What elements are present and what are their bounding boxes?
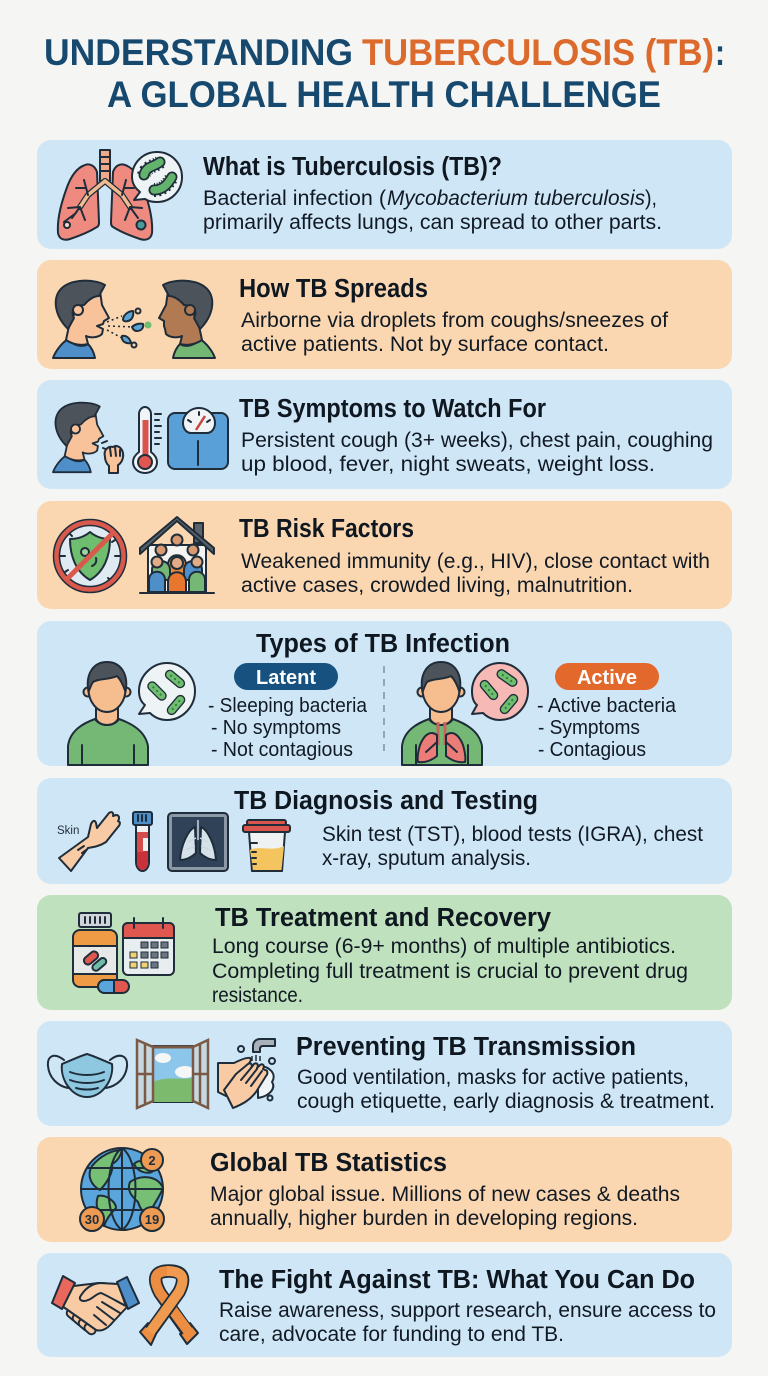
heading: How TB Spreads (239, 275, 428, 303)
panel: diagnosis and testing (37, 778, 732, 884)
icon: coughing person (53, 403, 123, 473)
icon: open window (137, 1040, 208, 1108)
text block: active cases, crowded living, malnutrition. (241, 573, 633, 597)
icon: lungs with bacteria bubble (58, 150, 182, 240)
text block: Persistent cough (3+ weeks), chest pain, coughing (241, 428, 713, 452)
text block: Weakened immunity (e.g., HIV), close contact with (241, 549, 710, 573)
text block: up blood, fever, night sweats, weight loss. (241, 452, 655, 476)
panel: symptoms (37, 380, 732, 489)
active list: - Active bacteria (537, 694, 677, 717)
icon: handshake (52, 1276, 139, 1336)
text block: Major global issue. Millions of new cases & deaths (210, 1182, 680, 1206)
text block: resistance. (212, 983, 303, 1007)
title: : (715, 32, 725, 73)
text block: primarily affects lungs, can spread to other parts. (203, 210, 662, 234)
latent list (208, 694, 368, 761)
panel: how TB spreads (37, 260, 732, 369)
text block (241, 549, 710, 597)
heading: Preventing TB Transmission (296, 1033, 636, 1061)
icon: globe with number badges: 30 (85, 1212, 99, 1227)
icon: globe with number badges: 19 (145, 1212, 159, 1227)
icon: globe with number badges: 2 (148, 1153, 156, 1168)
icon: globe with number badges (80, 1148, 164, 1231)
active label: Active (577, 667, 637, 689)
icon: awareness ribbon (140, 1271, 198, 1345)
active label (555, 663, 659, 690)
text block (212, 934, 688, 1007)
text block: x-ray, sputum analysis. (322, 846, 531, 870)
title: TUBERCULOSIS (TB) (362, 32, 714, 73)
heading: TB Treatment and Recovery (215, 904, 552, 932)
text block (322, 822, 703, 870)
icon: cough transmission between two people (53, 281, 215, 358)
text block (241, 308, 668, 356)
active list (537, 694, 677, 761)
icon: calendar (123, 918, 174, 975)
icon: weakened immunity shield (54, 520, 126, 592)
icon: sputum cup (243, 820, 290, 871)
icon: medicine bottle (73, 913, 129, 993)
icon: chest x-ray (168, 813, 228, 871)
title (44, 32, 725, 115)
heading: Types of TB Infection (256, 630, 510, 658)
heading: The Fight Against TB: What You Can Do (219, 1266, 695, 1294)
latent person with bubble (68, 662, 195, 765)
latent list: - Not contagious (211, 738, 353, 761)
heading: TB Symptoms to Watch For (239, 395, 546, 423)
icon: skin test on arm (57, 812, 120, 871)
text block: Mycobacterium tuberculosis (387, 186, 645, 210)
text block: ), (645, 186, 657, 210)
panel: preventing transmission (37, 1021, 732, 1126)
text block (219, 1298, 716, 1346)
heading: What is Tuberculosis (TB)? (203, 153, 502, 181)
heading: TB Diagnosis and Testing (234, 787, 538, 815)
icon: weight scale (168, 408, 228, 469)
icon: face mask (48, 1054, 127, 1097)
icon: hand washing (218, 1039, 275, 1108)
text block: Long course (6-9+ months) of multiple antibiotics. (212, 934, 676, 958)
text block: Bacterial infection ( (203, 186, 387, 210)
text block (297, 1065, 715, 1113)
text block: annually, higher burden in developing regions. (210, 1206, 638, 1230)
panel: the fight against TB (37, 1253, 732, 1357)
panel: types of TB infection (37, 621, 732, 766)
text block: Skin test (TST), blood tests (IGRA), chest (322, 822, 703, 846)
panel: treatment and recovery (37, 895, 732, 1010)
title: A GLOBAL HEALTH CHALLENGE (107, 74, 661, 115)
heading: Global TB Statistics (210, 1149, 447, 1177)
text block (241, 428, 713, 476)
icon: blood tube (133, 812, 152, 871)
text block: cough etiquette, early diagnosis & treatment. (297, 1089, 715, 1113)
text block (203, 186, 662, 234)
latent list: - Sleeping bacteria (208, 694, 368, 717)
active list: - Symptoms (538, 716, 640, 739)
text block: care, advocate for funding to end TB. (219, 1322, 564, 1346)
icon: crowded house (140, 517, 214, 593)
active list: - Contagious (538, 738, 646, 761)
panel: risk factors (37, 501, 732, 609)
heading: TB Risk Factors (239, 515, 414, 543)
panel: what is TB (37, 140, 732, 249)
text block (210, 1182, 680, 1230)
title: UNDERSTANDING (44, 32, 353, 73)
latent label (234, 663, 338, 690)
icon: thermometer (133, 407, 161, 473)
latent list: - No symptoms (211, 716, 341, 739)
active person with lungs and bubble (402, 662, 528, 765)
text block: Good ventilation, masks for active patients, (297, 1065, 689, 1089)
text block: Completing full treatment is crucial to prevent drug (212, 959, 688, 983)
latent label: Latent (256, 667, 316, 689)
text block: Airborne via droplets from coughs/sneezes of (241, 308, 668, 332)
text block: Raise awareness, support research, ensure access to (219, 1298, 716, 1322)
text block: active patients. Not by surface contact. (241, 332, 609, 356)
panel: global statistics (37, 1137, 732, 1242)
icon: skin test on arm: Skin (57, 825, 79, 837)
